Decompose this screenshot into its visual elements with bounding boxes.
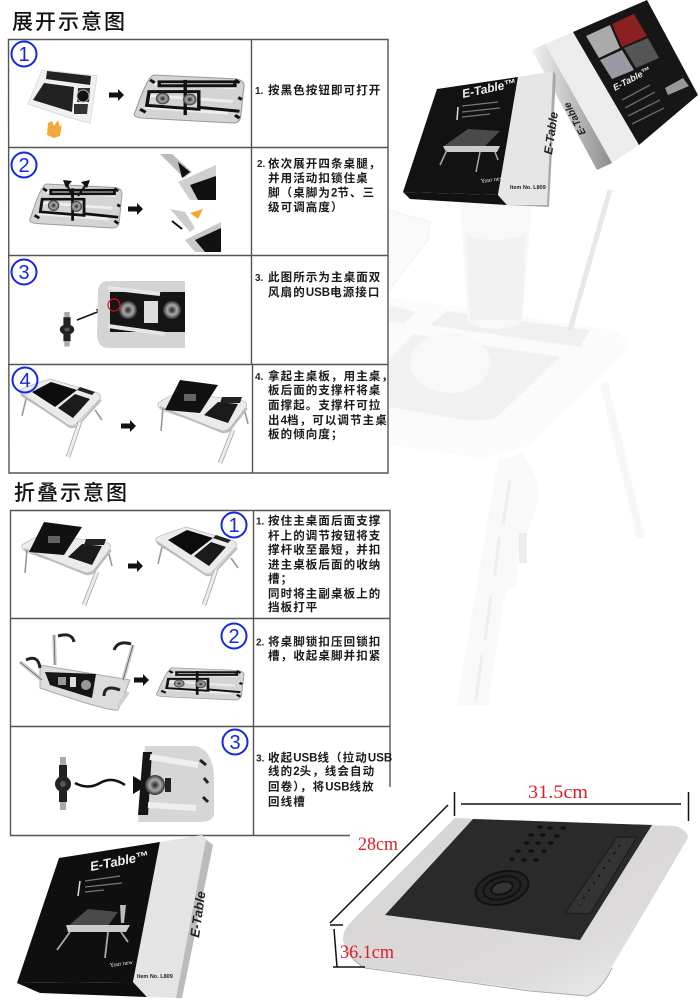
icon: open tray xyxy=(134,75,244,123)
fan vent xyxy=(472,866,532,910)
icon: leg detail top xyxy=(160,154,216,200)
step 3 text: 此图所示为主桌面双 xyxy=(268,270,381,284)
number 3: 3 xyxy=(18,262,30,284)
step 1 text: 1. xyxy=(255,86,264,97)
step 3 text: 回线槽 xyxy=(268,794,306,808)
icon: closed table and hand xyxy=(28,70,97,138)
panel: unfold steps xyxy=(8,39,394,473)
step 4 text: 板的倾向度； xyxy=(268,427,344,441)
step 2 text: 级可调高度） xyxy=(268,200,344,214)
number 2 xyxy=(222,624,246,648)
photos on box xyxy=(586,14,659,79)
step 4 text: 拿起主桌板，用主桌， xyxy=(268,369,394,383)
step 3 text: 收起USB线（拉动USB xyxy=(268,750,392,764)
step 3 text: 风扇的USB电源接口 xyxy=(268,285,380,299)
straw xyxy=(570,190,610,330)
mouse xyxy=(410,333,490,393)
step 1 xyxy=(12,42,381,138)
step 1 text: 挡板打平 xyxy=(268,600,318,614)
wavy cable with arrow xyxy=(75,776,148,794)
step 1 text: 进主桌板后面的收纳 xyxy=(268,558,381,572)
adjustment strip xyxy=(565,837,637,914)
step 4 text: 面撑起。支撑杆可拉 xyxy=(268,398,381,412)
icon: table with raised panel xyxy=(158,380,248,463)
step 2 text: 将桌脚锁扣压回锁扣 xyxy=(268,634,381,648)
heading: fold: 折叠示意图 xyxy=(14,482,129,505)
step 2 text: 并用活动扣锁住桌 xyxy=(268,171,369,185)
step 1 text: 按住主桌面后面支撑 xyxy=(268,514,381,528)
icon: table with raised panel xyxy=(22,522,112,605)
icon: leg detail bottom xyxy=(170,209,221,252)
product box: bottom left: E-Table xyxy=(187,890,208,938)
product box: back: E-Table xyxy=(562,100,589,137)
product box: front xyxy=(403,71,561,207)
step 1 xyxy=(22,512,381,614)
vent holes xyxy=(509,825,566,862)
number 1: 1 xyxy=(228,515,240,537)
icon: usb xyxy=(60,312,74,346)
curved arrows xyxy=(26,635,131,696)
dimension: depth xyxy=(330,805,448,925)
number 2: 2 xyxy=(18,155,30,177)
number 2: 2 xyxy=(228,626,240,648)
panel: fold steps xyxy=(10,510,392,836)
product box: front: E-Table™ xyxy=(461,76,517,101)
product box: front: Your new xyxy=(480,176,505,185)
step 1 text: 按黑色按钮即可打开 xyxy=(268,83,381,97)
step 1 text: 撑杆收至最短，并扣 xyxy=(268,542,381,556)
step 3 text xyxy=(256,750,392,808)
glass xyxy=(460,203,532,329)
number 3 xyxy=(12,260,36,284)
step 4 text xyxy=(255,369,394,441)
icon: tray with usb port xyxy=(97,281,185,348)
heading: unfold: 展开示意图 xyxy=(12,11,127,34)
table on box xyxy=(440,129,500,172)
step 3 text: 线的2头，线会自动 xyxy=(268,764,375,778)
dimension: depth: 28cm xyxy=(358,834,398,855)
step 3 xyxy=(55,730,392,822)
dimension: height: 36.1cm xyxy=(340,942,394,963)
table on box xyxy=(57,905,130,958)
arrow xyxy=(109,89,124,101)
step 1 text: 槽； xyxy=(268,572,293,586)
step 2 text: 槽，收起桌脚并扣紧 xyxy=(268,648,381,662)
step 2 text: 脚（桌脚为2节、三 xyxy=(268,186,375,200)
front leg xyxy=(457,453,539,705)
arrow xyxy=(128,560,143,572)
arrow xyxy=(121,420,136,432)
step 2 text: 依次展开四条桌腿， xyxy=(268,156,381,170)
icon: flipped table with legs xyxy=(20,635,133,710)
number 4 xyxy=(12,368,38,392)
product box: back: E-Table™ xyxy=(611,65,652,93)
icon: open table xyxy=(20,379,102,457)
icon: tray xyxy=(157,668,244,700)
step 2 text xyxy=(256,634,381,662)
arrow xyxy=(128,203,143,215)
number 1: 1 xyxy=(18,44,30,66)
product box: bottom left xyxy=(17,835,213,998)
step 2 text: 2. xyxy=(257,159,266,170)
product box: front: Item No. L809 xyxy=(510,185,546,191)
step 3 text xyxy=(255,270,381,299)
step 3 xyxy=(12,260,381,348)
step 1 text xyxy=(256,514,381,614)
back leg xyxy=(600,382,645,538)
step 3 text: 3. xyxy=(256,754,265,764)
step 1 text: 1. xyxy=(256,516,265,528)
step 2 text xyxy=(257,156,381,214)
number 1 xyxy=(12,42,36,66)
dimension: width xyxy=(454,782,688,821)
step 2 text: 2. xyxy=(256,638,265,648)
step 4 text: 板后面的支撑杆将桌 xyxy=(268,383,381,397)
product box: bottom left: Item No. L809 xyxy=(137,974,173,980)
background ghost table illustration xyxy=(389,190,645,705)
icon: usb reel xyxy=(55,757,71,810)
icon: open table xyxy=(156,527,238,605)
step 1 text: 杆上的调节按钮将支 xyxy=(268,528,381,542)
icon: tray back xyxy=(138,746,214,822)
product box: bottom left: Your new xyxy=(109,960,134,969)
step 3 text: 3. xyxy=(255,273,264,284)
icon: tray with arrows xyxy=(30,180,122,228)
number 3: 3 xyxy=(229,732,241,754)
product box: back xyxy=(532,0,698,170)
step 4 text: 出4档，可以调节主桌 xyxy=(268,413,388,427)
dimension: width: 31.5cm xyxy=(528,782,588,803)
step 3 text: 回卷），将USB线放 xyxy=(268,780,375,794)
step 4 text: 4. xyxy=(255,372,264,383)
number 1 xyxy=(222,512,246,538)
number 2 xyxy=(12,152,36,178)
step 2 xyxy=(20,624,381,710)
dimension: height xyxy=(333,929,394,967)
number 4: 4 xyxy=(19,370,31,392)
number 3 xyxy=(222,730,248,754)
step 4 xyxy=(12,368,394,463)
step 2 xyxy=(12,152,381,252)
product photo: folded table with dimensions xyxy=(330,782,688,996)
product box: bottom left: E-Table™ xyxy=(89,848,150,874)
step 1 text: 同时将主副桌板上的 xyxy=(268,586,381,600)
product box: front: E-Table xyxy=(541,111,561,155)
arrow xyxy=(134,674,149,686)
arrow xyxy=(77,308,106,320)
